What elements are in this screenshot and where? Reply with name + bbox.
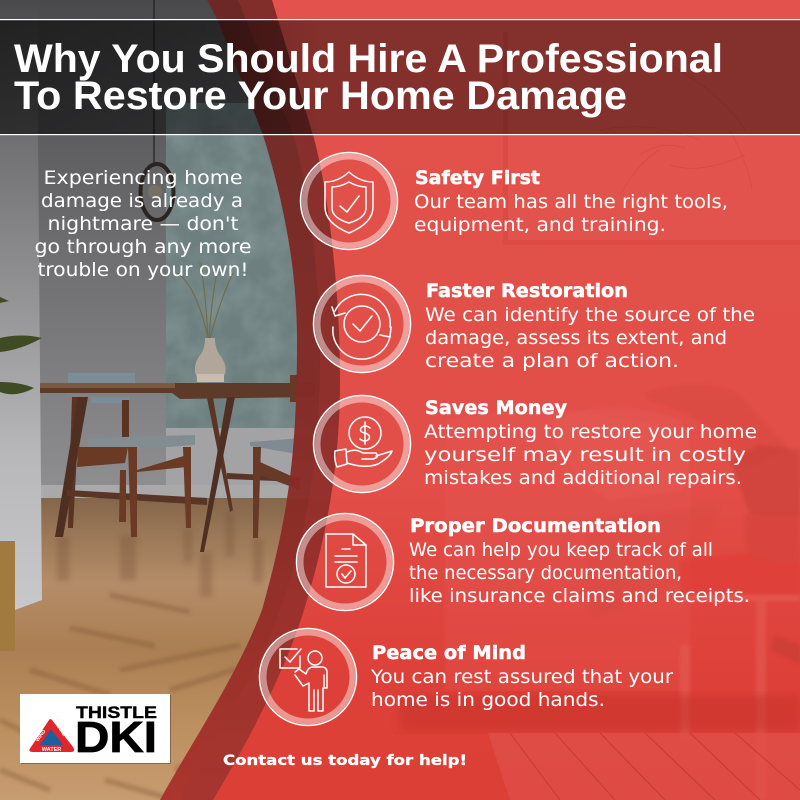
call to action: Contact us today for help! bbox=[223, 753, 467, 769]
logo: Thistle DKI: FIRE bbox=[55, 725, 67, 738]
item: Proper Documentation: We can help you keep track of all bbox=[409, 539, 713, 561]
item: Saves Money bbox=[314, 396, 757, 492]
item: Saves Money: yourself may result in costly bbox=[424, 444, 746, 466]
room behind tint bbox=[400, 32, 800, 800]
lamp bbox=[153, 0, 155, 165]
item: Faster Restoration: create a plan of action. bbox=[425, 350, 679, 372]
logo: Thistle DKI bbox=[20, 694, 171, 764]
intro text: Experiencing home bbox=[44, 167, 242, 189]
item: Peace of Mind: home is in good hands. bbox=[371, 689, 605, 711]
item: Safety First bbox=[300, 152, 728, 250]
item: Faster Restoration: Faster Restoration bbox=[426, 280, 628, 302]
icon: shield bbox=[300, 152, 398, 250]
item: Peace of Mind: You can rest assured that your bbox=[370, 666, 673, 688]
item: Faster Restoration: damage, assess its extent, and bbox=[425, 327, 727, 349]
item: Faster Restoration bbox=[314, 276, 755, 372]
plant leaves bbox=[0, 297, 42, 394]
header band bbox=[0, 19, 800, 135]
icon: document with check bbox=[296, 514, 394, 610]
item: Safety First: Safety First bbox=[415, 167, 540, 189]
intro text: go through any more bbox=[34, 236, 251, 258]
red panel bbox=[213, 0, 800, 800]
title: To Restore Your Home Damage bbox=[14, 74, 627, 118]
item: Safety First: equipment, and training. bbox=[414, 214, 666, 236]
item: Saves Money: mistakes and additional repairs. bbox=[424, 467, 742, 489]
icon: person with checkbox bbox=[260, 628, 356, 726]
icon: circular arrows with check bbox=[314, 276, 410, 372]
chair behind table bbox=[68, 373, 135, 403]
icon: hand with coin bbox=[314, 396, 410, 492]
dark wave bbox=[160, 0, 800, 800]
logo: Thistle DKI: WATER bbox=[42, 747, 61, 753]
item: Proper Documentation: Proper Documentation bbox=[410, 515, 661, 537]
item: Peace of Mind bbox=[260, 628, 673, 726]
middle wave tone bbox=[180, 0, 800, 800]
intro text: damage is already a bbox=[41, 190, 243, 212]
item: Peace of Mind: Peace of Mind bbox=[372, 642, 526, 664]
item: Saves Money: Saves Money bbox=[425, 397, 568, 419]
table bbox=[40, 383, 315, 399]
floor: herringbone bbox=[0, 595, 265, 800]
item: Saves Money: Attempting to restore your home bbox=[424, 421, 757, 443]
title: Why You Should Hire A Professional bbox=[14, 37, 723, 81]
intro text bbox=[34, 167, 251, 281]
title bbox=[14, 37, 723, 118]
item: Proper Documentation: like insurance claims and receipts. bbox=[409, 585, 750, 607]
floor: leg reflections bbox=[57, 512, 263, 597]
chair right bbox=[250, 437, 315, 457]
item: Proper Documentation: the necessary documentation, bbox=[409, 562, 682, 584]
photo: dining room bbox=[0, 0, 340, 800]
intro text: nightmare — don't bbox=[48, 213, 238, 235]
item: Safety First: Our team has all the right tools, bbox=[414, 191, 728, 213]
logo: Thistle DKI: THISTLE bbox=[76, 704, 157, 722]
chair front bbox=[88, 435, 195, 449]
vase and stems bbox=[177, 263, 233, 338]
logo: Thistle DKI: DKI bbox=[75, 713, 157, 762]
intro text: trouble on your own! bbox=[38, 259, 248, 281]
item: Faster Restoration: We can identify the source of the bbox=[425, 304, 755, 326]
logo: Thistle DKI: WIND bbox=[35, 728, 48, 743]
item: Proper Documentation bbox=[296, 514, 750, 610]
